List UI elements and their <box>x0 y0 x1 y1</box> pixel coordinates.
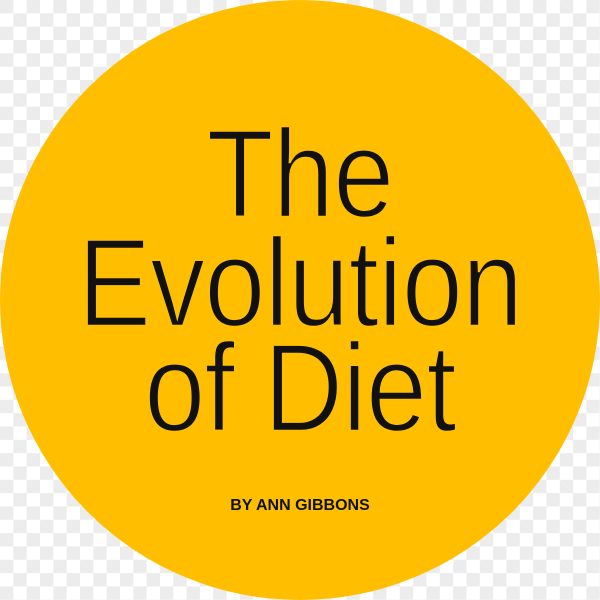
title <box>78 105 522 458</box>
title: The <box>207 105 393 244</box>
title: of Diet <box>144 319 456 458</box>
title: Evolution <box>78 214 522 353</box>
byline: BY ANN GIBBONS <box>230 497 370 514</box>
